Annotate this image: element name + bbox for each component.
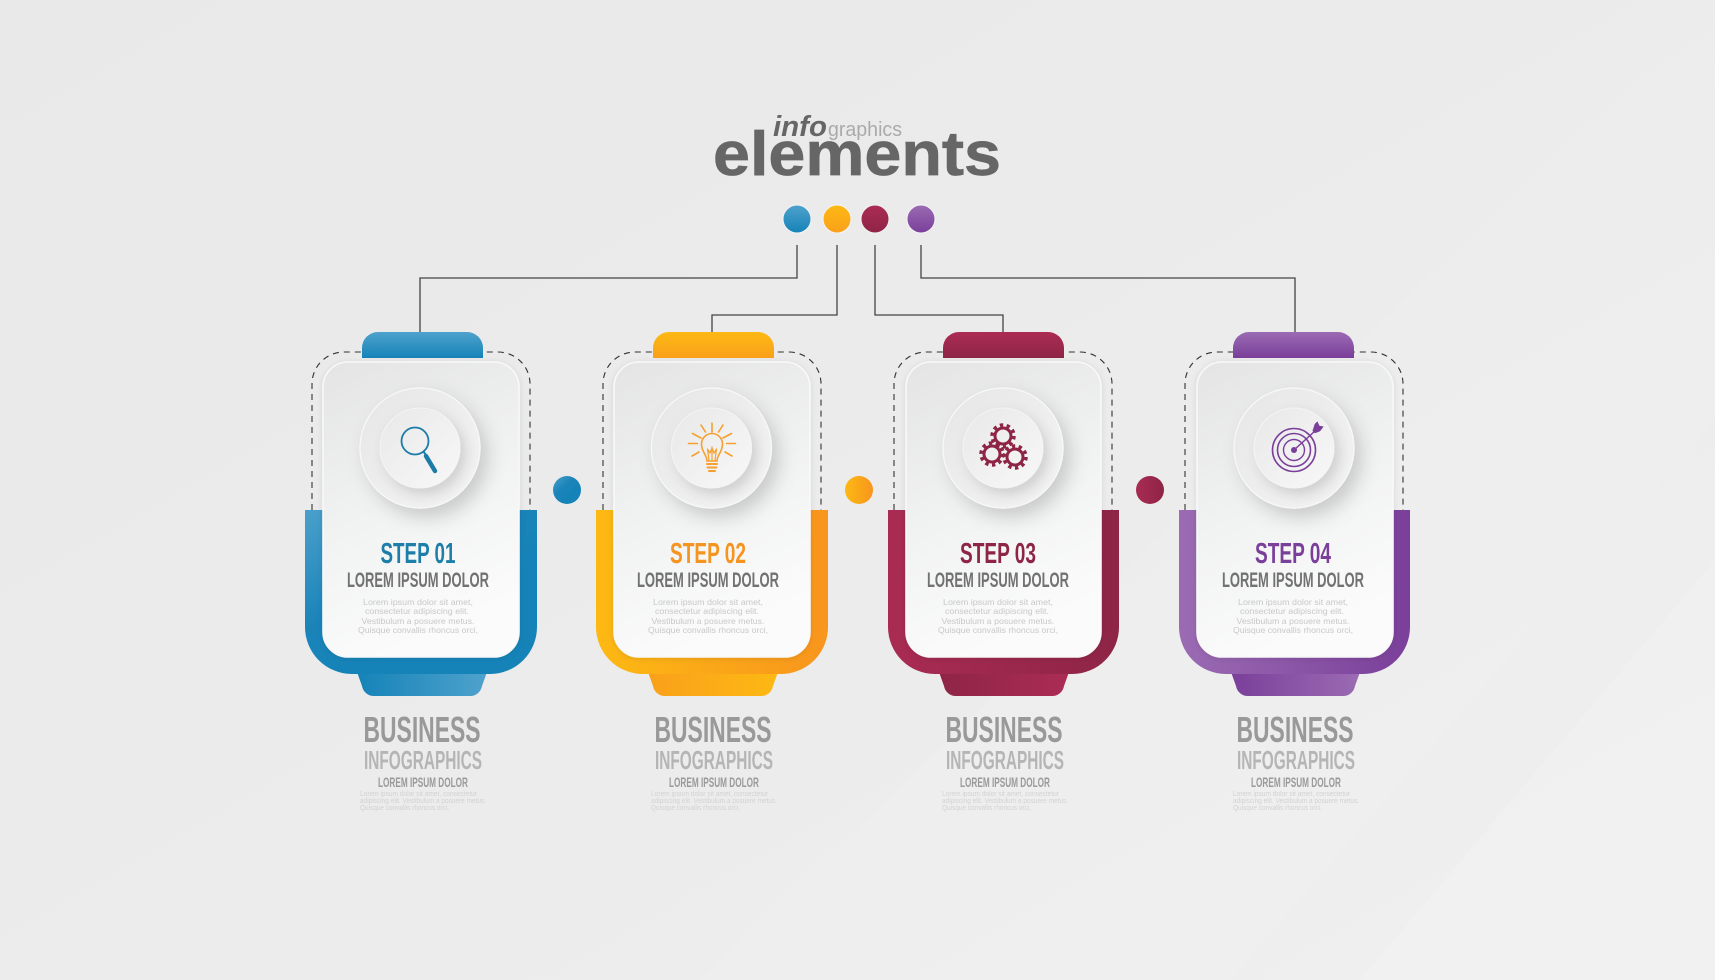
step 4 panel bbox=[1179, 332, 1410, 696]
inner disc bbox=[963, 408, 1043, 488]
step paragraph: consectetur adipiscing elit. bbox=[365, 606, 469, 616]
step paragraph: Lorem ipsum dolor sit amet, bbox=[943, 597, 1053, 607]
bottom tab bbox=[357, 672, 487, 696]
dashed outline bbox=[312, 352, 530, 510]
title word: graphics: graphics bbox=[828, 119, 902, 141]
dashed outline bbox=[894, 352, 1112, 510]
dashed outline bbox=[1185, 352, 1403, 510]
title bbox=[713, 111, 1001, 189]
top legend dots bbox=[783, 205, 935, 233]
business caption 4: Quisque convallis rhoncus orci, bbox=[1233, 805, 1322, 812]
step paragraph: Lorem ipsum dolor sit amet, bbox=[653, 597, 763, 607]
bottom tab bbox=[1231, 672, 1360, 696]
step paragraph bbox=[1233, 597, 1353, 635]
inner disc bbox=[380, 408, 460, 488]
step 1 panel bbox=[305, 332, 537, 696]
step subtitle: LOREM IPSUM DOLOR bbox=[927, 568, 1069, 592]
business caption 1: Lorem ipsum dolor sit amet, consectetur bbox=[360, 791, 478, 798]
business caption 3 bbox=[942, 709, 1068, 812]
business caption 1: BUSINESS bbox=[364, 709, 480, 750]
step paragraph: Lorem ipsum dolor sit amet, bbox=[363, 597, 473, 607]
icon: light bulb bbox=[688, 423, 736, 471]
step paragraph bbox=[938, 597, 1058, 635]
business caption 2: Quisque convallis rhoncus orci, bbox=[651, 805, 740, 812]
business caption 1: INFOGRAPHICS bbox=[364, 745, 482, 775]
colored frame bbox=[888, 510, 1119, 674]
business caption 3: LOREM IPSUM DOLOR bbox=[960, 774, 1050, 790]
step 2 panel bbox=[596, 332, 828, 696]
connector lines bbox=[420, 245, 1295, 332]
step label: STEP 01 bbox=[380, 538, 456, 570]
step paragraph bbox=[648, 597, 768, 635]
card bbox=[1197, 362, 1393, 657]
step paragraph: Quisque convallis rhoncus orci, bbox=[358, 625, 478, 635]
business caption 2: INFOGRAPHICS bbox=[655, 745, 773, 775]
outer disc bbox=[360, 388, 480, 508]
connector dot 3 bbox=[1136, 476, 1164, 504]
colored frame bbox=[305, 510, 537, 674]
bottom tab bbox=[648, 672, 778, 696]
step label: STEP 04 bbox=[1255, 538, 1331, 570]
step paragraph: Quisque convallis rhoncus orci, bbox=[648, 625, 768, 635]
title word: elements: elements bbox=[713, 120, 1001, 189]
business caption 1: LOREM IPSUM DOLOR bbox=[378, 774, 468, 790]
top tab bbox=[943, 332, 1064, 358]
business caption 2: BUSINESS bbox=[654, 709, 772, 750]
business caption 1: Quisque convallis rhoncus orci, bbox=[360, 805, 449, 812]
connector dot 2 bbox=[845, 476, 873, 504]
business caption 3: Lorem ipsum dolor sit amet, consectetur bbox=[942, 791, 1060, 798]
inner disc bbox=[1254, 408, 1334, 488]
business caption 2 bbox=[651, 709, 777, 812]
business caption 4: BUSINESS bbox=[1236, 709, 1354, 750]
colored frame bbox=[1179, 510, 1410, 674]
step label: STEP 03 bbox=[960, 538, 1036, 570]
icon: gears bbox=[981, 425, 1026, 468]
business caption 2: LOREM IPSUM DOLOR bbox=[669, 774, 759, 790]
card bbox=[323, 362, 519, 657]
business caption 3: Quisque convallis rhoncus orci, bbox=[942, 805, 1031, 812]
step subtitle: LOREM IPSUM DOLOR bbox=[347, 568, 489, 592]
card bbox=[906, 362, 1101, 657]
business caption 4: adipiscing elit. Vestibulum a posuere metus. bbox=[1233, 798, 1359, 805]
step paragraph: Lorem ipsum dolor sit amet, bbox=[1238, 597, 1348, 607]
business caption 4 bbox=[1233, 709, 1359, 812]
step paragraph: consectetur adipiscing elit. bbox=[655, 606, 759, 616]
card bbox=[614, 362, 810, 657]
top tab bbox=[1233, 332, 1354, 358]
step label: STEP 02 bbox=[670, 538, 746, 570]
step paragraph: Vestibulum a posuere metus. bbox=[652, 616, 764, 626]
business caption 1: adipiscing elit. Vestibulum a posuere metus. bbox=[360, 798, 486, 805]
step paragraph: Vestibulum a posuere metus. bbox=[362, 616, 474, 626]
business caption 2: Lorem ipsum dolor sit amet, consectetur bbox=[651, 791, 769, 798]
business caption 3: adipiscing elit. Vestibulum a posuere metus. bbox=[942, 798, 1068, 805]
step paragraph: Quisque convallis rhoncus orci, bbox=[1233, 625, 1353, 635]
step paragraph: Vestibulum a posuere metus. bbox=[942, 616, 1054, 626]
step 3 panel bbox=[888, 332, 1119, 696]
business caption 1 bbox=[360, 709, 486, 812]
outer disc bbox=[652, 388, 772, 508]
business caption 3: BUSINESS bbox=[946, 709, 1062, 750]
business caption 2: adipiscing elit. Vestibulum a posuere metus. bbox=[651, 798, 777, 805]
top tab bbox=[653, 332, 774, 358]
outer disc bbox=[943, 388, 1063, 508]
inner disc bbox=[672, 408, 752, 488]
connector dot 1 bbox=[553, 476, 581, 504]
business caption 4: INFOGRAPHICS bbox=[1237, 745, 1355, 775]
colored frame bbox=[596, 510, 828, 674]
business caption 3: INFOGRAPHICS bbox=[946, 745, 1064, 775]
icon: magnifier bbox=[402, 428, 435, 471]
business caption 4: LOREM IPSUM DOLOR bbox=[1251, 774, 1341, 790]
dashed outline bbox=[603, 352, 821, 510]
top tab bbox=[362, 332, 483, 358]
bottom tab bbox=[939, 672, 1069, 696]
outer disc bbox=[1234, 388, 1354, 508]
step paragraph: Quisque convallis rhoncus orci, bbox=[938, 625, 1058, 635]
step paragraph: consectetur adipiscing elit. bbox=[1240, 606, 1344, 616]
step paragraph bbox=[358, 597, 478, 635]
step subtitle: LOREM IPSUM DOLOR bbox=[1222, 568, 1364, 592]
icon: target with arrow bbox=[1272, 422, 1323, 472]
title word: info: info bbox=[773, 111, 827, 143]
step paragraph: consectetur adipiscing elit. bbox=[945, 606, 1049, 616]
business caption 4: Lorem ipsum dolor sit amet, consectetur bbox=[1233, 791, 1351, 798]
step subtitle: LOREM IPSUM DOLOR bbox=[637, 568, 779, 592]
step paragraph: Vestibulum a posuere metus. bbox=[1236, 616, 1350, 626]
